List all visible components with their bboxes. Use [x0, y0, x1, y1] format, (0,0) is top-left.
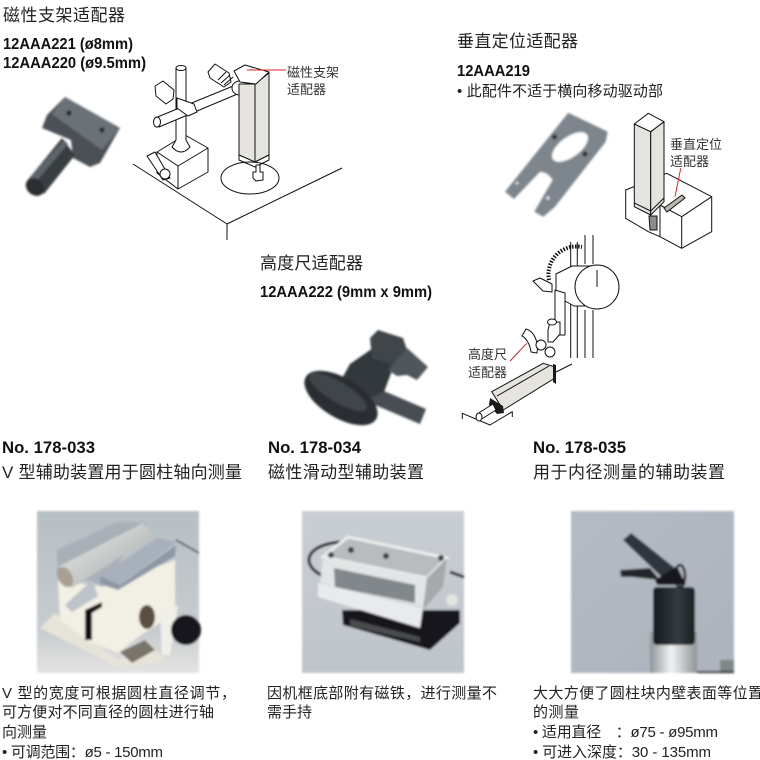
leader line [510, 343, 527, 361]
note: • 此配件不适于横向移动驱动部 [457, 83, 663, 100]
model number: No. 178-033 [2, 439, 95, 457]
part number: 12AAA219 [457, 63, 530, 80]
gauge body [221, 65, 279, 194]
label: height gauge adapter: 高度尺 [468, 347, 507, 362]
product name: 用于内径测量的辅助装置 [533, 463, 725, 482]
description: 向测量 [2, 724, 47, 741]
diagram: height gauge with adapter [462, 235, 619, 425]
diagram: gauge on magnetic stand [133, 64, 342, 240]
label: magnetic stand adapter: 磁性支架 [287, 65, 339, 80]
photo: height gauge adapter part [296, 330, 428, 436]
model number: No. 178-034 [268, 439, 362, 457]
part number: 12AAA222 (9mm x 9mm) [260, 284, 432, 301]
label: vertical positioning adapter: 适配器 [670, 154, 709, 169]
block [626, 173, 712, 248]
label: magnetic stand adapter [287, 65, 339, 97]
diagram: gauge on vertical adapter [626, 113, 722, 248]
column: No. 178-035 [533, 439, 760, 760]
leader line [247, 69, 286, 71]
column: No. 178-033 [2, 439, 242, 760]
section: vertical positioning adapter [457, 32, 722, 248]
photo: magnetic sliding auxiliary device [302, 511, 464, 673]
product name: 磁性滑动型辅助装置 [268, 463, 424, 482]
heading: height gauge adapter: 高度尺适配器 [260, 254, 363, 273]
description: 因机框底部附有磁铁，进行测量不 [267, 685, 497, 702]
part numbers: 12AAA221 (ø8mm) [3, 36, 133, 53]
dial indicator [533, 265, 619, 335]
vertical rods [571, 235, 593, 358]
part numbers [3, 36, 146, 72]
product name: V 型辅助装置用于圆柱轴向测量 [2, 463, 242, 482]
leader line [675, 168, 681, 197]
description: • 适用直径 ：ø75 - ø95mm [533, 724, 718, 741]
description: 的测量 [533, 704, 579, 721]
base and rod [462, 404, 512, 425]
magnetic base [147, 135, 208, 189]
description: V 型的宽度可根据圆柱直径调节， [2, 685, 236, 702]
label: height gauge adapter: 适配器 [468, 365, 507, 380]
heading: magnetic stand adapter: 磁性支架适配器 [3, 6, 125, 25]
description [2, 685, 236, 760]
photo: vertical positioning plate [505, 113, 608, 217]
photo: magnetic stand adapter part [22, 97, 120, 200]
heading: vertical positioning adapter: 垂直定位适配器 [457, 32, 578, 51]
bracket [664, 195, 685, 212]
part numbers: 12AAA220 (ø9.5mm) [3, 55, 146, 72]
linear gauge body [489, 363, 572, 414]
clamp and knob [522, 319, 560, 357]
section: magnetic stand adapter [3, 6, 342, 240]
model number: No. 178-035 [533, 439, 626, 457]
cross rod and clamps [154, 64, 248, 127]
description: 可方便对不同直径的圆柱进行轴 [2, 704, 214, 721]
post [172, 66, 190, 152]
column: No. 178-034 [267, 439, 497, 721]
label: magnetic stand adapter: 适配器 [287, 82, 326, 97]
photo: internal diameter auxiliary device [571, 511, 734, 673]
description [267, 685, 497, 721]
description: 大大方便了圆柱块内壁表面等位置 [533, 684, 760, 702]
section: height gauge adapter [260, 235, 619, 436]
description [533, 684, 760, 760]
label: vertical positioning adapter [670, 137, 722, 169]
label: vertical positioning adapter: 垂直定位 [670, 137, 722, 152]
description: 需手持 [267, 704, 312, 721]
gauge body [634, 113, 664, 230]
photo: V-type auxiliary device [37, 511, 201, 673]
label: height gauge adapter [468, 347, 507, 380]
scale disk [548, 246, 582, 280]
table edges [133, 164, 342, 240]
